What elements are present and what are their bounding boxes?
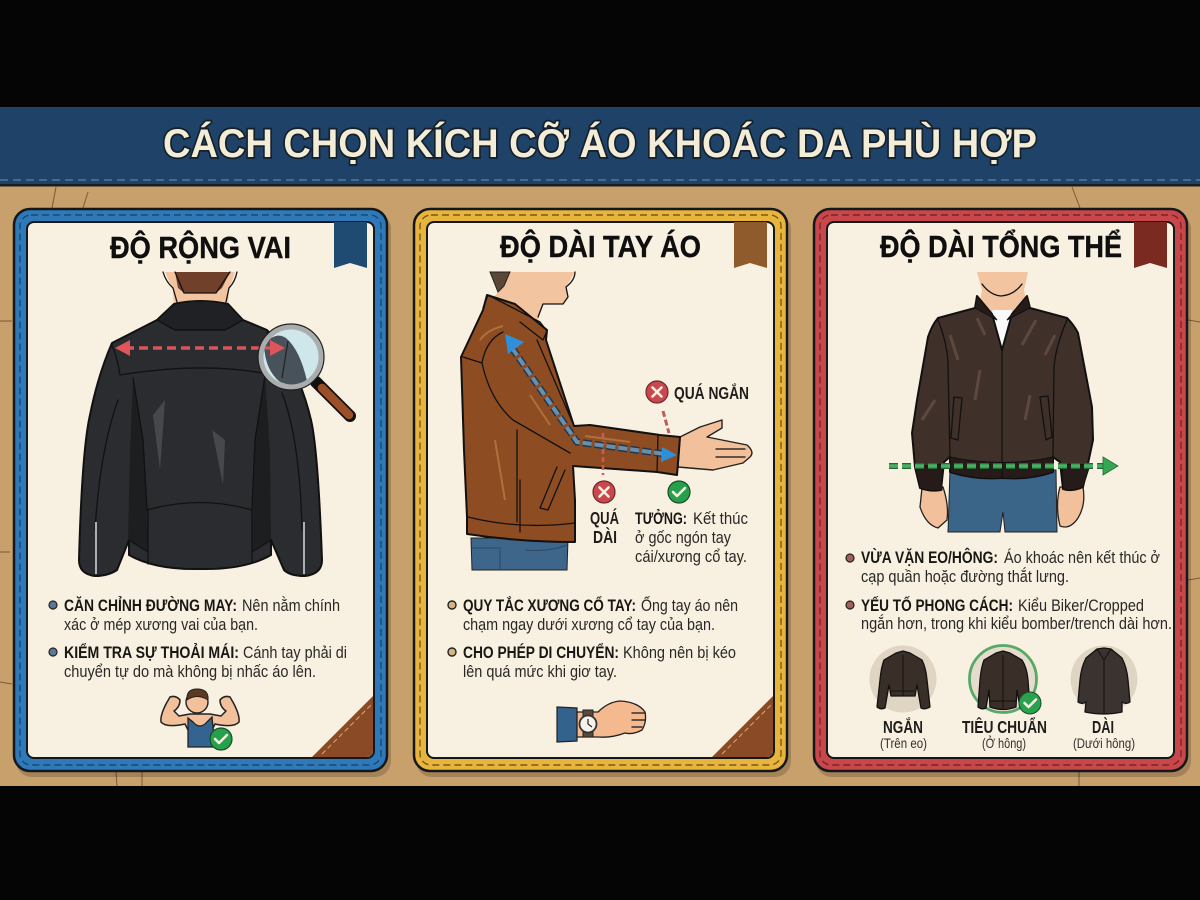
style option: long: (Dưới hông) — [1073, 735, 1135, 751]
tips: sleeve length: Không nên bị kéo — [623, 643, 736, 662]
t-shirt — [992, 310, 1012, 350]
tips: sleeve length: lên quá mức khi giơ tay. — [463, 662, 617, 681]
tips: overall length: VỪA VẶN EO/HÔNG: — [861, 548, 998, 567]
panel: shoulder width — [14, 209, 387, 771]
tips: sleeve length: Ống tay áo nên — [641, 595, 738, 615]
hand — [678, 420, 752, 470]
illustration: black jacket back — [79, 272, 350, 576]
measuring arrow — [115, 340, 285, 356]
heading: ĐỘ DÀI TỔNG THỂ — [880, 228, 1122, 264]
jacket — [461, 295, 680, 542]
tips: overall length — [846, 548, 1172, 633]
tips: shoulder width: CĂN CHỈNH ĐƯỜNG MAY: — [64, 596, 237, 615]
tips: shoulder width — [49, 596, 347, 681]
label: ideal: ở gốc ngón tay — [635, 528, 731, 547]
style option: short: NGẮN — [883, 716, 923, 737]
tips: shoulder width: Cánh tay phải di — [243, 643, 347, 662]
heading: ĐỘ DÀI TAY ÁO — [500, 228, 701, 264]
label: ideal: TƯỞNG: — [635, 509, 687, 528]
label: too long: QUÁ — [590, 507, 619, 528]
jeans — [471, 538, 568, 570]
label: too long: DÀI — [593, 526, 617, 547]
corner patch — [712, 696, 773, 757]
bookmark ribbon — [334, 222, 367, 268]
too-long marker — [602, 433, 604, 475]
tips: sleeve length — [448, 595, 738, 681]
hands — [920, 487, 948, 528]
waist measuring arrow — [889, 457, 1118, 475]
style option: long — [1070, 646, 1138, 751]
tan leather background — [0, 186, 1200, 786]
tips: overall length: Áo khoác nên kết thúc ở — [1004, 548, 1160, 567]
illustration: man in brown jacket — [461, 272, 752, 570]
bookmark ribbon — [734, 222, 767, 268]
jacket — [912, 296, 1093, 491]
tips: shoulder width: xác ở mép xương vai của bạn. — [64, 615, 258, 634]
icon: wrist with watch — [557, 701, 646, 742]
label: ideal: Kết thúc — [693, 509, 748, 528]
style option: short — [870, 646, 936, 751]
too-short marker — [663, 411, 669, 433]
panel: overall length — [814, 209, 1187, 771]
icon: flexing man — [161, 689, 239, 750]
tips: sleeve length: chạm ngay dưới xương cổ tay của bạn. — [463, 615, 715, 634]
title: CÁCH CHỌN KÍCH CỠ ÁO KHOÁC DA PHÙ HỢP — [163, 120, 1037, 166]
style option: long: DÀI — [1092, 716, 1114, 737]
illustration: man in bomber jacket — [889, 272, 1118, 532]
panel: sleeve length — [414, 209, 787, 771]
label: too long — [590, 481, 619, 547]
jeans — [948, 470, 1057, 532]
label: ideal — [635, 481, 748, 566]
header banner — [0, 107, 1200, 186]
style option: standard, selected: (Ở hông) — [982, 734, 1026, 751]
tips: overall length: Kiểu Biker/Cropped — [1018, 596, 1144, 615]
style option: standard, selected: TIÊU CHUẨN — [962, 716, 1047, 737]
tips: shoulder width: Nên nằm chính — [242, 596, 340, 615]
label: too short: QUÁ NGẮN — [674, 382, 749, 403]
heading: ĐỘ RỘNG VAI — [110, 229, 291, 265]
tips: overall length: cạp quần hoặc đường thắt lưng. — [861, 567, 1069, 586]
corner patch — [312, 696, 373, 757]
tips: sleeve length: QUY TẮC XƯƠNG CỔ TAY: — [463, 596, 636, 615]
tips: overall length: YẾU TỐ PHONG CÁCH: — [861, 595, 1013, 615]
style option: short: (Trên eo) — [880, 735, 927, 751]
icon: magnifying glass — [258, 324, 350, 416]
tips: sleeve length: CHO PHÉP DI CHUYỂN: — [463, 643, 619, 662]
label: too short — [646, 381, 749, 403]
tips: shoulder width: chuyển tự do mà không bị nhấc áo lên. — [64, 662, 316, 681]
style option: standard, selected — [962, 646, 1047, 751]
tips: shoulder width: KIỂM TRA SỰ THOẢI MÁI: — [64, 643, 239, 662]
label: ideal: cái/xương cổ tay. — [635, 547, 747, 566]
bookmark ribbon — [1134, 222, 1167, 268]
sleeve measuring arrow — [505, 334, 677, 462]
